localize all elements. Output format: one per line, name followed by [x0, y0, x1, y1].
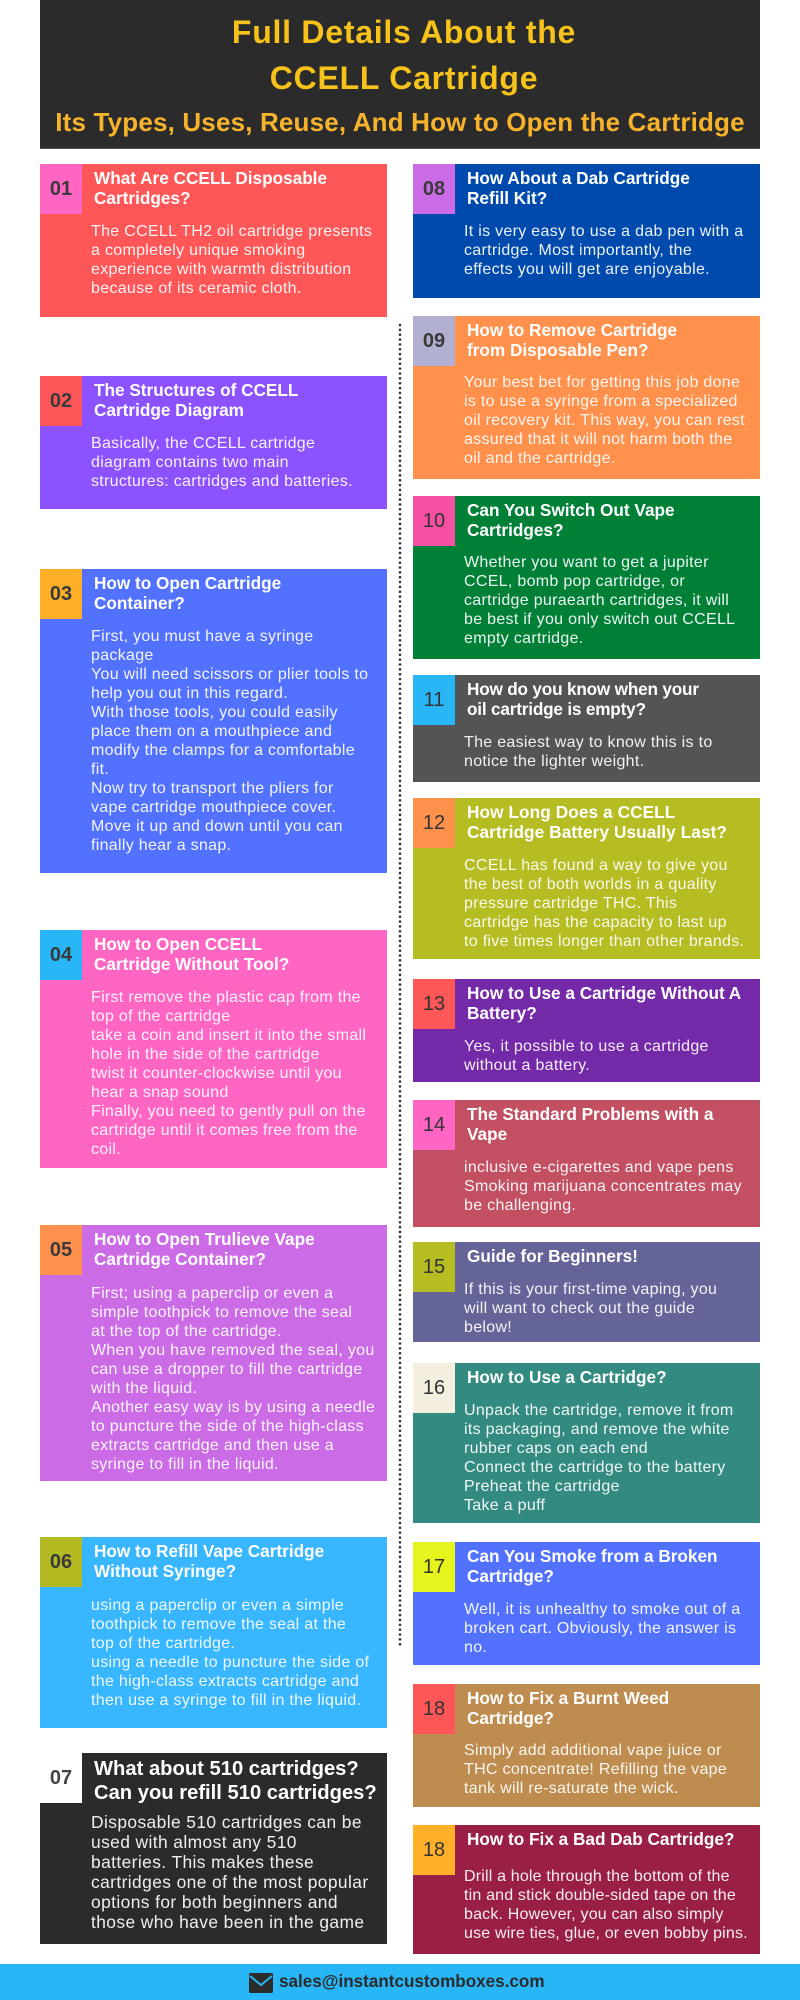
- text 01: The CCELL TH2 oil cartridge presents: [91, 223, 372, 240]
- text 03: fit.: [91, 761, 109, 778]
- panel: 13: [413, 979, 760, 1082]
- text 11: [464, 734, 713, 770]
- text 18 bad dab: tin and stick double-sided tape on the: [464, 1887, 736, 1904]
- text 07: used with almost any 510: [91, 1832, 297, 1852]
- panel: 07: [40, 1753, 387, 1944]
- text 03: help you out in this regard.: [91, 685, 288, 702]
- dotted divider line: [398, 324, 402, 1646]
- text 04: top of the cartridge: [91, 1008, 230, 1025]
- badge 10: 10: [423, 510, 445, 532]
- badge 18: [413, 1684, 455, 1734]
- heading 05: How to Open Trulieve Vape: [94, 1229, 315, 1249]
- text 01: [91, 223, 372, 297]
- text 05: at the top of the cartridge.: [91, 1323, 282, 1340]
- badge 03: [40, 569, 82, 619]
- panel: 01: [40, 164, 387, 317]
- badge 13: 13: [423, 993, 445, 1015]
- panel: 18 bad dab: [413, 1825, 760, 1954]
- text 05: to puncture the side of the high-class: [91, 1418, 364, 1435]
- heading 10: Can You Switch Out Vape: [467, 500, 675, 520]
- heading 03: How to Open Cartridge: [94, 573, 281, 593]
- panel: 17: [413, 1542, 760, 1665]
- heading 09: [467, 320, 677, 360]
- footer bar: [0, 1964, 800, 2000]
- text 05: [91, 1285, 375, 1473]
- text 18 burnt weed: [464, 1742, 727, 1797]
- panel: 06: [40, 1537, 387, 1728]
- text 14: [464, 1159, 742, 1214]
- text 09: oil recovery kit. This way, you can rest: [464, 412, 745, 429]
- text 04: hole in the side of the cartridge: [91, 1046, 320, 1063]
- text 15: will want to check out the guide: [464, 1300, 695, 1317]
- badge 16: 16: [423, 1377, 445, 1399]
- text 10: cartridge puraearth cartridges, it will: [464, 592, 729, 609]
- text 09: is to use a syringe from a specialized: [464, 393, 738, 410]
- text 01: because of its ceramic cloth.: [91, 280, 302, 297]
- heading 13: Battery?: [467, 1003, 537, 1023]
- panel: 15: [413, 1242, 760, 1342]
- text 05: Another easy way is by using a needle: [91, 1399, 375, 1416]
- heading 14: Vape: [467, 1124, 507, 1144]
- text 17: no.: [464, 1639, 487, 1656]
- heading 01: [94, 168, 327, 208]
- badge 02: 02: [50, 390, 72, 412]
- badge 08: 08: [423, 178, 445, 200]
- badge 15: [413, 1242, 455, 1292]
- heading 01: What Are CCELL Disposable: [94, 168, 327, 188]
- badge 08: [413, 164, 455, 214]
- text 10: Whether you want to get a jupiter: [464, 554, 709, 571]
- text 16: Preheat the cartridge: [464, 1478, 620, 1495]
- text 12: the best of both worlds in a quality: [464, 876, 717, 893]
- heading 09: How to Remove Cartridge: [467, 320, 677, 340]
- heading 04: Cartridge Without Tool?: [94, 954, 289, 974]
- heading 11: How do you know when your: [467, 679, 699, 699]
- heading 12: Cartridge Battery Usually Last?: [467, 822, 727, 842]
- text 10: be best if you only switch out CCELL: [464, 611, 735, 628]
- title: CCELL Cartridge: [270, 60, 538, 96]
- text 12: pressure cartridge THC. This: [464, 895, 677, 912]
- text 03: place them on a mouthpiece and: [91, 723, 332, 740]
- text 16: Connect the cartridge to the battery: [464, 1459, 726, 1476]
- panel: 18 burnt weed: [413, 1684, 760, 1807]
- heading 01: Cartridges?: [94, 188, 190, 208]
- badge 12: 12: [423, 812, 445, 834]
- heading 07: Can you refill 510 cartridges?: [94, 1782, 377, 1804]
- text 03: Now try to transport the pliers for: [91, 780, 334, 797]
- text 15: below!: [464, 1319, 512, 1336]
- text 02: Basically, the CCELL cartridge: [91, 435, 315, 452]
- panel: 12: [413, 798, 760, 959]
- heading 06: How to Refill Vape Cartridge: [94, 1541, 324, 1561]
- text 06: [91, 1597, 369, 1709]
- text 18 burnt weed: THC concentrate! Refilling the vape: [464, 1761, 727, 1778]
- badge 02: [40, 376, 82, 426]
- heading 05: [94, 1229, 315, 1269]
- badge 16: [413, 1363, 455, 1413]
- contact email: sales@instantcustomboxes.com: [279, 1972, 545, 1991]
- text 04: [91, 989, 366, 1158]
- badge 05: 05: [50, 1239, 72, 1261]
- text 05: First; using a paperclip or even a: [91, 1285, 333, 1302]
- text 17: [464, 1601, 740, 1656]
- panel: 02: [40, 376, 387, 509]
- text 06: using a paperclip or even a simple: [91, 1597, 344, 1614]
- badge 14: [413, 1100, 455, 1150]
- heading 04: [94, 934, 289, 974]
- text 13: [464, 1038, 709, 1074]
- text 06: then use a syringe to fill in the liquid.: [91, 1692, 361, 1709]
- text 03: You will need scissors or plier tools to: [91, 666, 368, 683]
- badge 03: 03: [50, 583, 72, 605]
- text 07: those who have been in the game: [91, 1912, 364, 1932]
- text 15: [464, 1281, 717, 1336]
- text 18 bad dab: back. However, you can also simply: [464, 1906, 724, 1923]
- heading 14: [467, 1104, 714, 1144]
- panel: 16: [413, 1363, 760, 1523]
- text 06: using a needle to puncture the side of: [91, 1654, 369, 1671]
- heading 10: Cartridges?: [467, 520, 563, 540]
- text 18 burnt weed: tank will re-saturate the wick.: [464, 1780, 679, 1797]
- badge 05: [40, 1225, 82, 1275]
- text 18 bad dab: [464, 1868, 748, 1942]
- heading 18 burnt weed: Cartridge?: [467, 1708, 554, 1728]
- heading 18 burnt weed: [467, 1688, 669, 1728]
- text 06: top of the cartridge.: [91, 1635, 235, 1652]
- heading 14: The Standard Problems with a: [467, 1104, 713, 1124]
- heading 08: [467, 168, 690, 208]
- text 05: simple toothpick to remove the seal: [91, 1304, 352, 1321]
- title: [232, 14, 576, 96]
- badge 04: 04: [50, 944, 72, 966]
- text 05: extracts cartridge and then use a: [91, 1437, 334, 1454]
- panel: 08: [413, 164, 760, 298]
- badge 07: [40, 1753, 82, 1803]
- text 09: [464, 374, 745, 467]
- icon: envelope: [249, 1973, 273, 1993]
- text 06: toothpick to remove the seal at the: [91, 1616, 346, 1633]
- text 03: package: [91, 647, 154, 664]
- text 11: notice the lighter weight.: [464, 753, 644, 770]
- badge 09: [413, 316, 455, 366]
- heading 17: Cartridge?: [467, 1566, 554, 1586]
- heading 17: [467, 1546, 718, 1586]
- text 04: take a coin and insert it into the small: [91, 1027, 366, 1044]
- badge 01: [40, 164, 82, 214]
- badge 18 second: [413, 1825, 455, 1875]
- text 01: experience with warmth distribution: [91, 261, 351, 278]
- panel: 14: [413, 1100, 760, 1227]
- text 09: assured that it will not harm both the: [464, 431, 732, 448]
- text 04: twist it counter-clockwise until you: [91, 1065, 342, 1082]
- heading 15: Guide for Beginners!: [467, 1246, 638, 1266]
- heading 06: [94, 1541, 324, 1581]
- text 10: empty cartridge.: [464, 630, 584, 647]
- text 07: batteries. This makes these: [91, 1852, 314, 1872]
- heading 03: [94, 573, 281, 613]
- text 16: its packaging, and remove the white: [464, 1421, 730, 1438]
- text 07: cartridges one of the most popular: [91, 1872, 369, 1892]
- heading 04: How to Open CCELL: [94, 934, 262, 954]
- text 18 bad dab: Drill a hole through the bottom of the: [464, 1868, 730, 1885]
- text 04: hear a snap sound: [91, 1084, 229, 1101]
- panel: 03: [40, 569, 387, 873]
- text 12: [464, 857, 744, 950]
- badge 01: 01: [50, 178, 72, 200]
- text 05: with the liquid.: [91, 1380, 197, 1397]
- text 16: [464, 1402, 734, 1514]
- text 03: First, you must have a syringe: [91, 628, 313, 645]
- text 02: structures: cartridges and batteries.: [91, 473, 353, 490]
- text 07: Disposable 510 cartridges can be: [91, 1812, 362, 1832]
- text 13: Yes, it possible to use a cartridge: [464, 1038, 709, 1055]
- heading 06: Without Syringe?: [94, 1561, 236, 1581]
- text 12: cartridge has the capacity to last up: [464, 914, 727, 931]
- text 17: broken cart. Obviously, the answer is: [464, 1620, 736, 1637]
- badge 17: [413, 1542, 455, 1592]
- badge 12: [413, 798, 455, 848]
- heading 09: from Disposable Pen?: [467, 340, 648, 360]
- text 10: CCEL, bomb pop cartridge, or: [464, 573, 685, 590]
- text 03: Move it up and down until you can: [91, 818, 343, 835]
- text 06: the high-class extracts cartridge and: [91, 1673, 359, 1690]
- text 14: Smoking marijuana concentrates may: [464, 1178, 742, 1195]
- header banner: [40, 0, 760, 149]
- heading 13: [467, 983, 741, 1023]
- text 08: It is very easy to use a dab pen with a: [464, 223, 743, 240]
- text 03: vape cartridge mouthpiece cover.: [91, 799, 336, 816]
- badge 11: [413, 675, 455, 725]
- heading 02: [94, 380, 298, 420]
- text 03: [91, 628, 368, 854]
- text 08: cartridge. Most importantly, the: [464, 242, 692, 259]
- badge 09: 09: [423, 330, 445, 352]
- text 01: a completely unique smoking: [91, 242, 305, 259]
- badge 10: [413, 496, 455, 546]
- badge 18 second: 18: [423, 1839, 445, 1861]
- heading 02: Cartridge Diagram: [94, 400, 244, 420]
- text 10: [464, 554, 735, 647]
- text 03: modify the clamps for a comfortable: [91, 742, 355, 759]
- heading 07: What about 510 cartridges?: [94, 1758, 359, 1780]
- text 04: First remove the plastic cap from the: [91, 989, 361, 1006]
- heading 11: [467, 679, 699, 719]
- panel: 05: [40, 1225, 387, 1481]
- panel: 04: [40, 930, 387, 1168]
- badge 07: 07: [50, 1767, 72, 1789]
- heading 11: oil cartridge is empty?: [467, 699, 646, 719]
- heading 02: The Structures of CCELL: [94, 380, 298, 400]
- heading 10: [467, 500, 675, 540]
- heading 08: How About a Dab Cartridge: [467, 168, 690, 188]
- text 05: can use a dropper to fill the cartridge: [91, 1361, 362, 1378]
- text 05: When you have removed the seal, you: [91, 1342, 375, 1359]
- heading 17: Can You Smoke from a Broken: [467, 1546, 718, 1566]
- text 12: to five times longer than other brands.: [464, 933, 744, 950]
- text 04: Finally, you need to gently pull on the: [91, 1103, 366, 1120]
- text 03: With those tools, you could easily: [91, 704, 338, 721]
- text 12: CCELL has found a way to give you: [464, 857, 728, 874]
- text 05: syringe to fill in the liquid.: [91, 1456, 279, 1473]
- title: Full Details About the: [232, 14, 576, 50]
- badge 18: 18: [423, 1698, 445, 1720]
- text 02: diagram contains two main: [91, 454, 289, 471]
- text 18 burnt weed: Simply add additional vape juice or: [464, 1742, 722, 1759]
- heading 12: [467, 802, 727, 842]
- text 02: [91, 435, 353, 490]
- text 14: be challenging.: [464, 1197, 576, 1214]
- badge 17: 17: [423, 1556, 445, 1578]
- panel: 10: [413, 496, 760, 659]
- text 08: effects you will get are enjoyable.: [464, 261, 710, 278]
- text 18 bad dab: use wire ties, glue, or even bobby pins.: [464, 1925, 748, 1942]
- text 15: If this is your first-time vaping, you: [464, 1281, 717, 1298]
- badge 14: 14: [423, 1114, 445, 1136]
- text 16: Take a puff: [464, 1497, 545, 1514]
- text 03: finally hear a snap.: [91, 837, 231, 854]
- badge 06: [40, 1537, 82, 1587]
- heading 03: Container?: [94, 593, 185, 613]
- badge 15: 15: [423, 1256, 445, 1278]
- text 13: without a battery.: [464, 1057, 590, 1074]
- text 04: coil.: [91, 1141, 121, 1158]
- badge 11: 11: [424, 689, 444, 711]
- text 16: rubber caps on each end: [464, 1440, 648, 1457]
- heading 18 burnt weed: How to Fix a Burnt Weed: [467, 1688, 669, 1708]
- badge 13: [413, 979, 455, 1029]
- text 07: options for both beginners and: [91, 1892, 338, 1912]
- heading 12: How Long Does a CCELL: [467, 802, 675, 822]
- text 17: Well, it is unhealthy to smoke out of a: [464, 1601, 740, 1618]
- text 16: Unpack the cartridge, remove it from: [464, 1402, 734, 1419]
- text 09: Your best bet for getting this job done: [464, 374, 740, 391]
- heading 08: Refill Kit?: [467, 188, 547, 208]
- heading 16: How to Use a Cartridge?: [467, 1367, 667, 1387]
- text 08: [464, 223, 744, 278]
- badge 04: [40, 930, 82, 980]
- heading 05: Cartridge Container?: [94, 1249, 266, 1269]
- heading 07: [94, 1758, 377, 1804]
- text 09: oil and the cartridge.: [464, 450, 616, 467]
- badge 06: 06: [50, 1551, 72, 1573]
- text 14: inclusive e-cigarettes and vape pens: [464, 1159, 734, 1176]
- subtitle: Its Types, Uses, Reuse, And How to Open the Cartridge: [55, 107, 745, 137]
- text 11: The easiest way to know this is to: [464, 734, 713, 751]
- text 07: [91, 1812, 369, 1932]
- panel: 09: [413, 316, 760, 479]
- panel: 11: [413, 675, 760, 782]
- heading 18 bad dab: How to Fix a Bad Dab Cartridge?: [467, 1829, 734, 1849]
- heading 13: How to Use a Cartridge Without A: [467, 983, 741, 1003]
- text 04: cartridge until it comes free from the: [91, 1122, 358, 1139]
